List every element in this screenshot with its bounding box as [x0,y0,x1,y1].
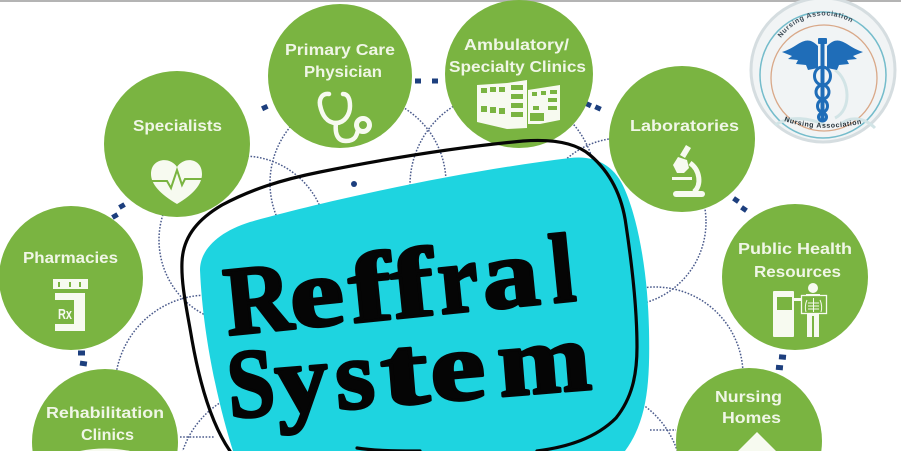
title: Reffral System: e [425,312,489,424]
title: Reffral System: e [284,238,349,350]
node: Rehabilitation Clinics: Clinics [81,427,134,444]
icon: pill bottle: Rx [58,306,72,323]
node: Rehabilitation Clinics [32,369,178,451]
node: Pharmacies [0,206,143,350]
node: Nursing Homes [676,368,822,451]
dotted connection circles [115,92,743,451]
node: Ambulatory / Specialty Clinics: Specialty Clinics [449,59,586,76]
title: Reffral System: S [223,329,279,440]
central cyan speech blob [200,157,649,451]
node: Public Health Resources: Public Health [738,241,852,258]
title: Reffral System [219,215,595,440]
navy dashes between circles [78,78,786,370]
node: Nursing Homes: Homes [722,410,781,427]
caduceus [782,38,863,122]
logo: Nursing Association badge [750,0,896,144]
icon: house roof [738,432,776,451]
node: Ambulatory / Specialty Clinics [445,0,593,148]
icon: stethoscope [320,94,370,141]
node: Specialists: Specialists [133,118,222,135]
logo: Nursing Association badge: Nursing Association [784,116,862,128]
title: Reffral System: a [476,218,544,331]
node: Pharmacies: Pharmacies [23,250,118,267]
title: Reffral System: m [493,303,595,418]
icon: pill bottle [53,279,88,331]
title: Reffral System: s [331,320,378,431]
node: Ambulatory / Specialty Clinics: Ambulatory/ [464,37,570,54]
black hand-drawn outline [182,140,637,451]
title: Reffral System: r [432,224,483,336]
faint background illustration [775,70,875,128]
title: Reffral System: t [377,316,433,428]
title: Reffral System: ff [344,228,441,344]
node: Specialists [104,71,250,217]
node: Laboratories [609,66,755,212]
node: Primary Care Physician: Physician [304,64,382,81]
logo: Nursing Association badge: Nursing Association [778,10,852,38]
icon: microscope [672,145,705,197]
icon: x-ray machine and patient [773,283,826,337]
icon: hospital building [477,80,560,129]
node: Public Health Resources: Resources [754,264,841,281]
title: Reffral System: R [219,243,298,357]
icon: clinic roof [80,448,130,451]
node: Nursing Homes: Nursing [715,389,782,406]
node: Primary Care Physician [268,4,412,148]
title: Reffral System: y [271,324,332,436]
icon: heart with pulse [151,160,202,204]
node: Laboratories: Laboratories [630,118,739,135]
title: Reffral System: l [545,215,579,324]
node: Public Health Resources [722,204,868,350]
arc text [781,15,868,38]
node: Rehabilitation Clinics: Rehabilitation [46,405,164,422]
node: Primary Care Physician: Primary Care [285,42,395,59]
